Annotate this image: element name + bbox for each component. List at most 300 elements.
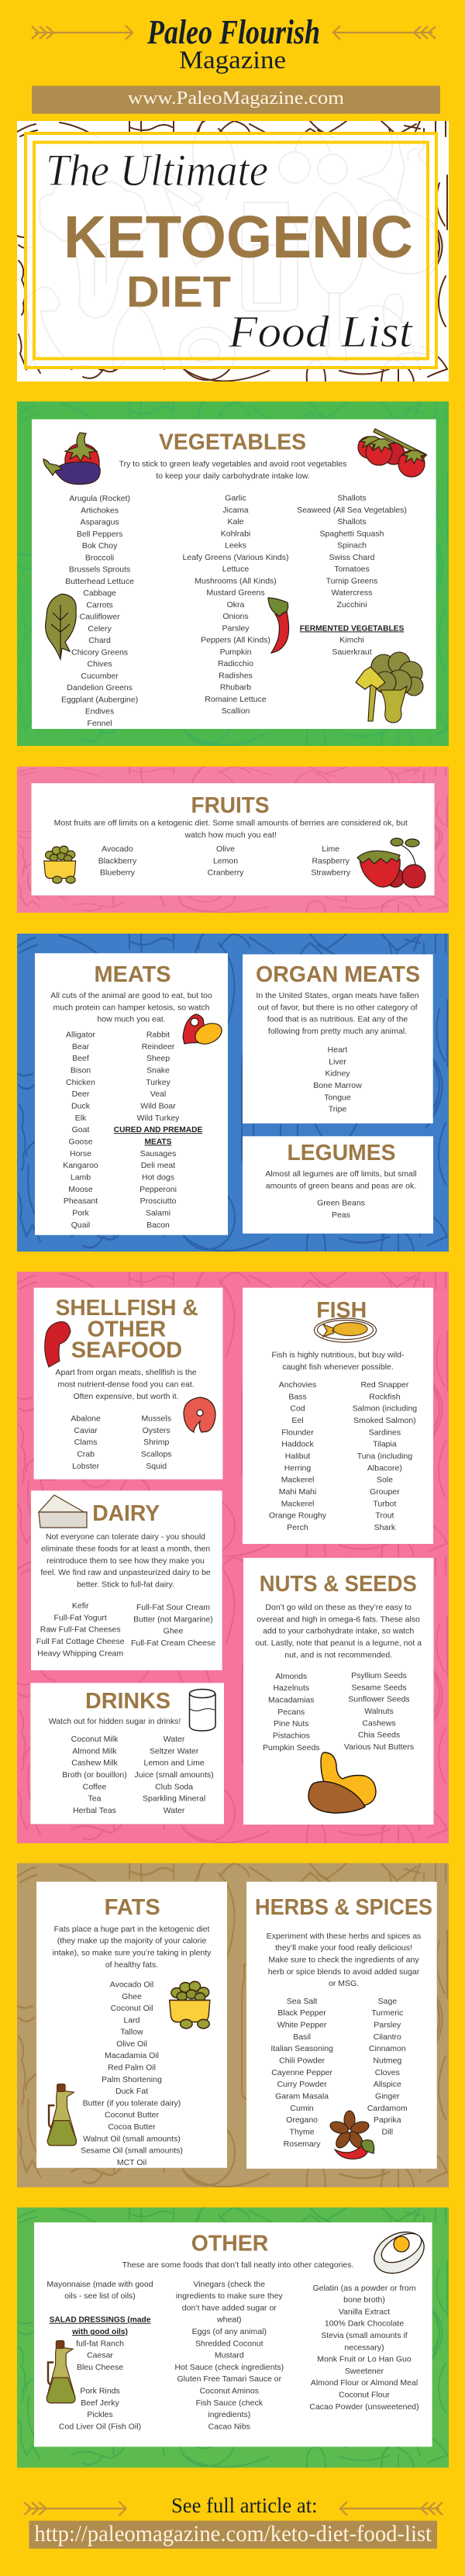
- heading: SHELLFISH &: [56, 1296, 198, 1321]
- list column 2: MEATS: [145, 1138, 172, 1146]
- list column 2: Romaine Lettuce: [205, 695, 267, 704]
- list column 2: Mushrooms (All Kinds): [195, 576, 277, 585]
- list column 1: Caesar: [87, 2351, 113, 2360]
- intro text: Apart from organ meats, shellfish is the: [56, 1368, 197, 1377]
- list: Tripe: [329, 1105, 346, 1114]
- list column 1: full-fat Ranch: [76, 2339, 124, 2348]
- panel: proteins (blue): [17, 934, 450, 1252]
- intro text: much protein can hamper ketosis, so watch: [53, 1003, 210, 1012]
- panel: fats, herbs and spices (tan): [17, 1863, 450, 2188]
- list column 1: Celery: [88, 624, 112, 634]
- list column 1: oils - see list of oils): [64, 2291, 136, 2301]
- list column 2: Wild Turkey: [137, 1114, 180, 1123]
- list column 2: Pumpkin: [220, 647, 252, 657]
- card: fats: [36, 1882, 227, 2168]
- list column 2: Lettuce: [222, 565, 249, 574]
- list column 3: Sauerkraut: [332, 647, 372, 657]
- list column 3: Spaghetti Squash: [320, 529, 384, 538]
- intro text: Try to stick to green leafy vegetables and avoid root vegetables: [119, 460, 346, 469]
- list column 2: Cashews: [362, 1718, 396, 1728]
- list column 1: Mackerel: [281, 1499, 314, 1508]
- card: fish: [243, 1288, 433, 1544]
- list column 3: Vanilla Extract: [339, 2307, 390, 2316]
- list column 2: don’t have added sugar or: [182, 2303, 277, 2312]
- list column 2: Peppers (All Kinds): [201, 636, 270, 645]
- intro text: better. Stick to full-fat dairy.: [77, 1580, 174, 1589]
- list column 2: Radishes: [219, 671, 253, 680]
- see full article label: See full article at:: [171, 2494, 318, 2517]
- list column 1: Goose: [69, 1137, 93, 1146]
- list column 1: Almonds: [275, 1672, 307, 1681]
- list column 2: Rhubarb: [220, 683, 251, 692]
- list column 1: Pickles: [87, 2410, 113, 2419]
- list column 1: Hazelnuts: [273, 1683, 309, 1693]
- list column 1: Moose: [68, 1185, 93, 1194]
- list column 2: Deli meat: [141, 1161, 175, 1170]
- list column 1: Thyme: [290, 2127, 315, 2136]
- list column 2: Walnuts: [364, 1707, 394, 1716]
- list column 2: Garlic: [225, 493, 246, 502]
- list: Sesame Oil (small amounts): [81, 2146, 183, 2156]
- list column 2: Eggs (of any animal): [192, 2327, 267, 2336]
- list column 1: Kangaroo: [63, 1161, 98, 1170]
- list column 2: Scallion: [222, 706, 250, 716]
- heading: OTHER: [88, 1317, 166, 1342]
- card: drinks: [30, 1683, 224, 1824]
- list column 2: Full-Fat Cream Cheese: [131, 1638, 215, 1648]
- list: Liver: [329, 1057, 346, 1066]
- list column 2: Turmeric: [371, 2008, 403, 2018]
- list column 1: Flounder: [281, 1428, 314, 1437]
- intro text: feel. We find raw and unpasteurized dairy to be: [40, 1568, 211, 1577]
- intro text: Don’t go wild on these as they’re easy to: [265, 1603, 412, 1612]
- list column 2: Olive: [216, 844, 235, 854]
- list column 2: Rabbit: [146, 1030, 170, 1039]
- list column 3: Raspberry: [312, 856, 350, 865]
- list column 2: Sage: [378, 1997, 397, 2006]
- list column 1: Kefir: [72, 1601, 89, 1611]
- icon: broccoli: [356, 652, 423, 723]
- list column 2: Hot dogs: [142, 1172, 174, 1182]
- list column 1: Dandelion Greens: [67, 683, 133, 692]
- list column 3: Coconut Flour: [339, 2390, 390, 2399]
- list column 1: Anchovies: [279, 1380, 316, 1390]
- list column 2: Parsley: [222, 623, 250, 633]
- icon: tomatoes on the vine: [358, 429, 426, 477]
- list column 1: Herbal Teas: [73, 1806, 116, 1815]
- intro text: food that is as nutritious. Eat any of the: [267, 1015, 408, 1024]
- logo: Paleo Flourish: Paleo Flourish: [146, 13, 320, 51]
- list column 2: Scallops: [141, 1449, 172, 1459]
- list column 2: wheat): [216, 2315, 242, 2325]
- intro text: amounts of green beans and peas are ok.: [266, 1181, 416, 1190]
- icon: strawberry and cherries: [357, 838, 425, 888]
- list column 2: Mussels: [141, 1414, 171, 1424]
- intro text: or MSG.: [329, 1979, 359, 1988]
- list column 2: Cacao Nibs: [208, 2422, 250, 2431]
- list column 1: Pine Nuts: [274, 1719, 309, 1728]
- list column 2: Sparkling Mineral: [143, 1794, 205, 1804]
- list column 1: Chili Powder: [279, 2056, 326, 2065]
- intro text: reintroduce them to see how they make you: [46, 1556, 205, 1566]
- intro text: In the United States, organ meats have fallen: [256, 991, 419, 1000]
- list column 2: Leafy Greens (Various Kinds): [183, 553, 288, 562]
- right arrow: [340, 2502, 443, 2516]
- intro text: (they make up the majority of your calorie: [57, 1936, 206, 1946]
- intro text: caught fish whenever possible.: [282, 1362, 394, 1372]
- icon: oil bottle: [47, 2084, 76, 2146]
- list column 3: Almond Flour or Almond Meal: [311, 2378, 418, 2388]
- left arrow: [32, 26, 133, 40]
- list column 1: Abalone: [71, 1414, 101, 1424]
- list column 2: Tuna (including: [357, 1452, 412, 1461]
- list column 2: Kale: [227, 517, 244, 527]
- list column 1: Bass: [288, 1392, 307, 1401]
- list column 1: Perch: [287, 1523, 308, 1532]
- list column 2: Fish Sauce (check: [196, 2398, 264, 2408]
- list column 1: Mahi Mahi: [279, 1487, 316, 1497]
- list column 2: Mustard: [215, 2351, 244, 2360]
- intro text: of healthy fats.: [105, 1960, 158, 1970]
- right arrow: [333, 26, 436, 40]
- list column 1: Haddock: [281, 1440, 314, 1449]
- title: The Ultimate: The Ultimate: [46, 145, 268, 195]
- list column 1: Lamb: [71, 1172, 91, 1182]
- list: Walnut Oil (small amounts): [83, 2134, 181, 2143]
- list column 2: Shark: [374, 1523, 396, 1532]
- article URL banner: http://paleomagazine.com/keto-diet-food-list: [34, 2521, 432, 2547]
- intro text: they’ll make your food really delicious!: [275, 1943, 412, 1953]
- panel: seafood, dairy, drinks, nuts (pink): [17, 1272, 450, 1843]
- list column 2: Grouper: [370, 1487, 400, 1497]
- heading: ORGAN MEATS: [256, 962, 420, 987]
- list column 2: Gluten Free Tamari Sauce or: [177, 2374, 282, 2384]
- list column 2: Oysters: [143, 1426, 170, 1435]
- list column 2: Sheep: [146, 1054, 170, 1063]
- list column 2: Parsley: [374, 2020, 401, 2029]
- list column 1: Pecans: [277, 1708, 305, 1717]
- icon: salmon steak: [184, 1397, 215, 1432]
- list column 2: Sole: [377, 1476, 393, 1485]
- list column 1: Chard: [88, 636, 111, 645]
- list column 1: Broth (or bouillon): [62, 1770, 127, 1780]
- heading: HERBS & SPICES: [255, 1895, 432, 1920]
- list column 3: necessary): [344, 2343, 384, 2352]
- list: Coconut Butter: [105, 2111, 160, 2120]
- list column 2: Pepperoni: [140, 1185, 177, 1194]
- list column 2: Hot Sauce (check ingredients): [174, 2363, 284, 2372]
- list column 3: Zucchini: [336, 600, 367, 609]
- intro text: to keep your daily carbohydrate intake low.: [156, 471, 310, 481]
- list column 1: Endives: [85, 707, 114, 717]
- heading: DAIRY: [92, 1501, 160, 1526]
- list column 2: Seltzer Water: [150, 1746, 199, 1756]
- list column 2: Paprika: [374, 2115, 401, 2125]
- list: Red Palm Oil: [108, 2063, 156, 2073]
- list column 2: Cardamom: [367, 2104, 408, 2113]
- list column 1: Blueberry: [100, 868, 136, 878]
- icon: cashew and almond: [308, 1752, 376, 1813]
- list column 1: Goat: [72, 1125, 89, 1134]
- list column 2: Cranberry: [208, 868, 244, 878]
- icon: boiled egg: [367, 2224, 431, 2281]
- list column 2: ingredients to make sure they: [176, 2291, 283, 2301]
- list column 2: Veal: [150, 1089, 166, 1099]
- list column 1: Tea: [88, 1794, 102, 1804]
- card: dairy: [31, 1490, 222, 1670]
- list column 1: Cauliflower: [80, 613, 120, 622]
- list column 2: Club Soda: [155, 1782, 193, 1791]
- heading: FRUITS: [191, 793, 270, 818]
- panel: fruits: [17, 767, 450, 913]
- list column 2: Reindeer: [142, 1042, 175, 1051]
- list column 2: Coconut Aminos: [200, 2387, 259, 2396]
- list column 1: Oregano: [286, 2115, 318, 2125]
- list: Kidney: [325, 1069, 350, 1079]
- card: herbs and spices: [246, 1882, 437, 2169]
- list column 1: Rosemary: [284, 2139, 321, 2149]
- heading: FATS: [105, 1895, 160, 1920]
- list column 1: Bok Choy: [82, 541, 118, 551]
- list column 2: Leeks: [225, 541, 246, 551]
- list column 1: Broccoli: [85, 553, 114, 562]
- list column 3: Spinach: [337, 541, 367, 551]
- list column 3: Shallots: [337, 517, 367, 527]
- list column 2: Ghee: [164, 1627, 184, 1636]
- intro text: Often expensive, but worth it.: [74, 1392, 179, 1401]
- list: Bone Marrow: [313, 1081, 362, 1090]
- list column 2: Squid: [146, 1462, 167, 1471]
- icon: steak and chicken: [183, 1014, 225, 1048]
- list column 2: Lemon and Lime: [143, 1759, 205, 1768]
- list column 1: Fennel: [88, 719, 112, 728]
- list: Green Beans: [317, 1199, 365, 1208]
- list column 1: Beef Jerky: [81, 2398, 120, 2408]
- icon: star anise and chili: [329, 2111, 374, 2159]
- list column 1: Bison: [71, 1065, 91, 1075]
- intro text: Most fruits are off limits on a ketogenic diet. Some small amounts of berries are considered ok, but: [54, 819, 408, 828]
- list column 1: Herring: [284, 1463, 311, 1473]
- intro text: following from pretty much any animal.: [268, 1027, 407, 1036]
- list column 2: ingredients): [208, 2410, 250, 2419]
- list column 3: Tomatoes: [334, 565, 370, 574]
- intro text: Fish is highly nutritious, but buy wild-: [271, 1351, 405, 1360]
- list column 1: Halibut: [285, 1452, 310, 1461]
- list: Avocado Oil: [110, 1980, 153, 1990]
- list column 1: Artichokes: [81, 506, 119, 515]
- list column 1: Blackberry: [98, 856, 137, 865]
- icon: leafy green: [46, 594, 76, 659]
- list column 1: Sea Salt: [287, 1997, 318, 2006]
- list column 2: Prosciutto: [140, 1196, 177, 1206]
- icon: eggplant and tomato: [43, 433, 100, 485]
- intro text: how much you eat.: [97, 1015, 166, 1024]
- list: Duck Fat: [115, 2087, 148, 2096]
- list column 2: Red Snapper: [360, 1380, 409, 1390]
- list column 2: Juice (small amounts): [135, 1770, 214, 1780]
- list column 3: FERMENTED VEGETABLES: [300, 624, 404, 633]
- heading: OTHER: [191, 2232, 268, 2257]
- list column 1: Italian Seasoning: [270, 2044, 333, 2053]
- icon: cheese wedge: [39, 1495, 87, 1528]
- list column 2: Radicchio: [218, 659, 253, 668]
- list column 3: Kimchi: [339, 636, 364, 645]
- list column 1: Deer: [72, 1089, 90, 1099]
- list column 2: Snake: [146, 1065, 170, 1075]
- intro text: watch how much you eat!: [184, 830, 277, 840]
- intro text: These are some foods that don’t fall neatly into other categories.: [122, 2260, 353, 2270]
- intro text: overeat and high in omega-6 fats. These also: [257, 1614, 420, 1624]
- list column 1: Curry Powder: [277, 2080, 327, 2089]
- list column 1: Bleu Cheese: [77, 2363, 123, 2372]
- intro text: most nutrient-dense food you can eat.: [57, 1380, 195, 1390]
- icon: bowl of olives: [44, 846, 76, 883]
- heading: SEAFOOD: [71, 1338, 182, 1363]
- list column 1: SALAD DRESSINGS (made: [50, 2316, 151, 2325]
- list column 2: Chia Seeds: [358, 1731, 400, 1740]
- list column 2: Turbot: [373, 1499, 396, 1508]
- list column 2: Wild Boar: [140, 1101, 176, 1110]
- list column 1: Beef: [72, 1054, 89, 1063]
- list column 3: Cacao Powder (unsweetened): [309, 2402, 419, 2412]
- card: legumes: [243, 1136, 433, 1234]
- list: Heart: [328, 1045, 347, 1055]
- list: Butter (if you tolerate dairy): [83, 2098, 181, 2108]
- list column 3: Stevia (small amounts if: [321, 2331, 408, 2340]
- list column 2: Smoked Salmon): [353, 1416, 416, 1425]
- heading: VEGETABLES: [159, 430, 306, 454]
- intro text: Fats place a huge part in the ketogenic diet: [54, 1925, 209, 1934]
- list column 1: Mayonnaise (made with good: [46, 2280, 153, 2289]
- list: MCT Oil: [117, 2158, 146, 2167]
- icon: chili pepper: [268, 598, 289, 653]
- list column 1: Full Fat Cottage Cheese: [36, 1637, 125, 1646]
- list column 1: Crab: [77, 1449, 95, 1459]
- list column 1: Clams: [74, 1438, 97, 1447]
- list column 1: Arugula (Rocket): [69, 494, 130, 503]
- heading: DRINKS: [85, 1689, 170, 1714]
- intro text: eliminate these foods for at least a month, then: [41, 1545, 210, 1554]
- footer: [24, 2494, 443, 2549]
- header: [32, 13, 436, 74]
- intro text: Watch out for hidden sugar in drinks!: [49, 1717, 181, 1726]
- card: organ meats: [243, 955, 433, 1124]
- list column 1: Cabbage: [83, 589, 116, 598]
- list column 1: Macadamias: [268, 1695, 315, 1704]
- list column 1: Cucumber: [81, 672, 119, 681]
- list column 1: Cumin: [290, 2104, 314, 2113]
- list column 1: Almond Milk: [72, 1746, 117, 1756]
- list column 1: Carrots: [86, 600, 113, 609]
- list column 1: Orange Roughy: [269, 1511, 327, 1521]
- intro text: Almost all legumes are off limits, but small: [265, 1169, 417, 1179]
- website banner: www.PaleoMagazine.com: [128, 88, 344, 109]
- list column 3: Shallots: [337, 493, 367, 502]
- list: Peas: [332, 1210, 350, 1220]
- list: Ghee: [122, 1992, 142, 2001]
- list column 1: Brussels Sprouts: [69, 565, 130, 575]
- intro text: out of favor, but there is no other category of: [257, 1003, 418, 1012]
- heading: LEGUMES: [287, 1141, 395, 1165]
- hero title panel: [17, 121, 450, 382]
- list column 2: Shredded Coconut: [195, 2339, 264, 2348]
- list column 1: Horse: [70, 1149, 91, 1159]
- intro text: out. Lastly, note that peanut is a legume, not a: [255, 1638, 422, 1648]
- list column 2: Dill: [382, 2127, 393, 2136]
- list column 2: Allspice: [374, 2080, 401, 2089]
- list column 1: Bell Peppers: [77, 530, 122, 539]
- list column 1: Black Pepper: [277, 2008, 326, 2018]
- panel: vegetables: [17, 402, 450, 746]
- logo: Magazine: Magazine: [179, 47, 286, 74]
- list: Cocoa Butter: [108, 2122, 156, 2132]
- list column 2: Water: [164, 1735, 185, 1744]
- title: Food List: Food List: [228, 306, 414, 357]
- list column 2: Albacore): [367, 1463, 402, 1473]
- list column 1: Mackerel: [281, 1476, 314, 1485]
- intro text: Make sure to check the ingredients of any: [268, 1956, 419, 1965]
- intro text: intake), so make sure you’re taking in plenty: [53, 1948, 212, 1957]
- list column 2: Kohlrabi: [221, 529, 250, 538]
- list column 2: CURED AND PREMADE: [114, 1126, 202, 1134]
- left arrow: [24, 2502, 126, 2516]
- icon: fish on plate: [315, 1318, 377, 1342]
- intro text: nut, and is not recommended.: [284, 1650, 392, 1659]
- list: Coconut Oil: [111, 2004, 153, 2013]
- list column 1: Basil: [293, 2032, 311, 2042]
- list column 2: Okra: [227, 600, 245, 609]
- intro text: Experiment with these herbs and spices as: [267, 1932, 421, 1941]
- list column 1: Eel: [291, 1416, 304, 1425]
- list column 1: Duck: [71, 1101, 91, 1110]
- list column 3: Monk Fruit or Lo Han Guo: [317, 2355, 412, 2364]
- title: KETOGENIC: KETOGENIC: [64, 204, 413, 271]
- list column 3: Turnip Greens: [326, 576, 377, 585]
- heading: NUTS & SEEDS: [260, 1572, 417, 1597]
- list column 2: Vinegars (check the: [193, 2280, 265, 2289]
- list column 2: Ginger: [375, 2091, 400, 2101]
- list column 2: Nutmeg: [373, 2056, 401, 2065]
- list column 1: Pumpkin Seeds: [263, 1743, 320, 1752]
- list: Tongue: [324, 1093, 351, 1102]
- list column 1: Pork Rinds: [80, 2387, 120, 2396]
- list column 1: Quail: [71, 1221, 90, 1230]
- list column 2: Mustard Greens: [206, 589, 265, 598]
- list column 2: Rockfish: [369, 1392, 401, 1401]
- list column 2: Various Nut Butters: [344, 1742, 414, 1752]
- list column 1: Pheasant: [64, 1196, 98, 1206]
- intro text: Not everyone can tolerate dairy - you should: [46, 1532, 205, 1542]
- list column 1: Chicken: [66, 1078, 95, 1087]
- icon: glass of water: [189, 1689, 215, 1731]
- icon: oil bottle: [46, 2341, 75, 2403]
- list column 1: Lobster: [72, 1462, 100, 1471]
- list column 2: Trout: [375, 1511, 394, 1521]
- list column 2: Butter (not Margarine): [133, 1614, 213, 1624]
- list column 2: Salmon (including: [353, 1404, 417, 1414]
- list column 2: Onions: [222, 612, 249, 621]
- website banner: [32, 86, 440, 114]
- list column 1: Cod: [290, 1404, 305, 1414]
- list column 1: Alligator: [66, 1030, 95, 1039]
- panel: other: [17, 2208, 450, 2467]
- list column 2: Cloves: [375, 2068, 400, 2077]
- list column 2: Bacon: [146, 1221, 170, 1230]
- list column 3: Gelatin (as a powder or from: [312, 2284, 416, 2293]
- list: Palm Shortening: [102, 2075, 162, 2084]
- heading: FISH: [316, 1298, 367, 1323]
- icon: red shrimp: [45, 1321, 71, 1367]
